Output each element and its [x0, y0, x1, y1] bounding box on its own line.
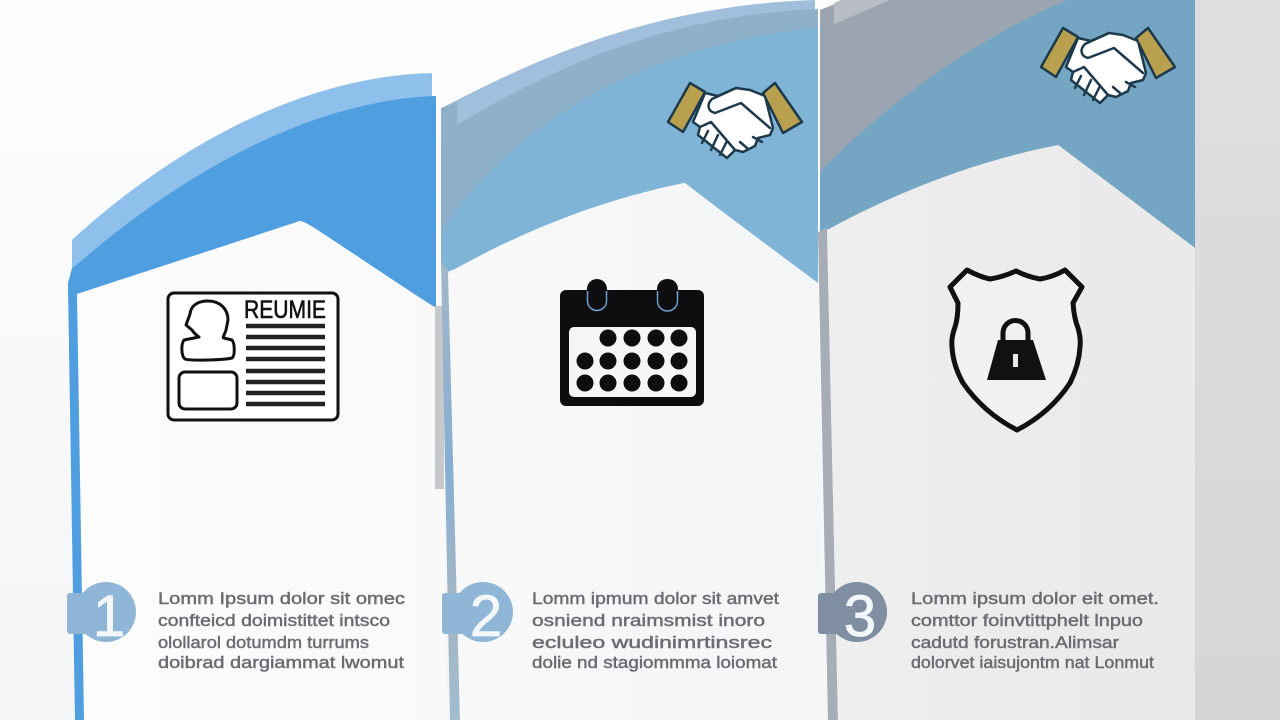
icon: handshake	[1041, 28, 1175, 103]
panel 1 right edge shadow	[435, 306, 444, 489]
badge 2: 2	[470, 584, 502, 649]
panel 2 light ribbon	[442, 0, 815, 130]
icon: calendar	[560, 279, 704, 406]
panel 3 blue ribbon	[820, 0, 1195, 248]
panel 3	[818, 0, 1195, 720]
panel 1 side strip	[68, 283, 84, 720]
badge 2	[442, 582, 513, 649]
text block 1: confteicd doimistittet intsco	[158, 611, 390, 630]
badge 3	[818, 582, 887, 649]
calendar dots	[576, 330, 688, 392]
panel 3 card	[827, 145, 1195, 720]
text block 3: cadutd forustran.Alimsar	[911, 633, 1119, 652]
panel 1	[67, 73, 447, 720]
text block 1: Lomm Ipsum dolor sit omec	[158, 589, 406, 608]
panel 3 grey ribbon	[820, 0, 1070, 215]
resume heading: REUMIE	[244, 296, 326, 324]
panel 2 side strip	[441, 262, 460, 720]
badge 1: 1	[93, 584, 125, 649]
panel 2 blue ribbon	[442, 28, 818, 285]
badge 1	[67, 582, 136, 649]
panel 1 blue ribbon	[68, 96, 436, 720]
panel 1 card	[77, 221, 447, 720]
calendar rings	[587, 279, 678, 311]
icon: resume	[168, 293, 338, 420]
text block 3: dolorvet iaisujontm nat Lonmut	[911, 653, 1154, 672]
text block 2: osniend nraimsmist inoro	[532, 611, 765, 630]
icon: handshake	[668, 83, 802, 158]
panel 1 light ribbon	[72, 73, 432, 270]
text block 1: olollarol dotumdm turrums	[158, 633, 369, 652]
right side backdrop	[1195, 0, 1280, 720]
panel 2 grey ribbon	[441, 9, 818, 270]
lock	[987, 320, 1046, 380]
icon: shield with lock	[950, 270, 1082, 430]
text block 2: dolie nd stagiommma loiomat	[532, 653, 777, 672]
text block 3	[911, 589, 1159, 672]
text block 2: Lomm ipmum dolor sit amvet	[532, 589, 779, 608]
panel 2 card	[448, 183, 825, 720]
panel 2	[441, 0, 825, 720]
text block 1: doibrad dargiammat lwomut	[158, 653, 404, 672]
resume lines	[246, 326, 325, 404]
text block 1	[158, 589, 406, 672]
text block 2: ecluleo wudinimrtinsrec	[532, 633, 773, 652]
text block 3: comttor foinvtittphelt lnpuo	[911, 611, 1143, 630]
panel 3 side strip	[818, 228, 838, 720]
text block 2	[532, 589, 779, 672]
badge 3: 3	[844, 584, 876, 649]
panel 3 light ribbon	[834, 0, 890, 24]
text block 3: Lomm ipsum dolor eit omet.	[911, 589, 1159, 608]
